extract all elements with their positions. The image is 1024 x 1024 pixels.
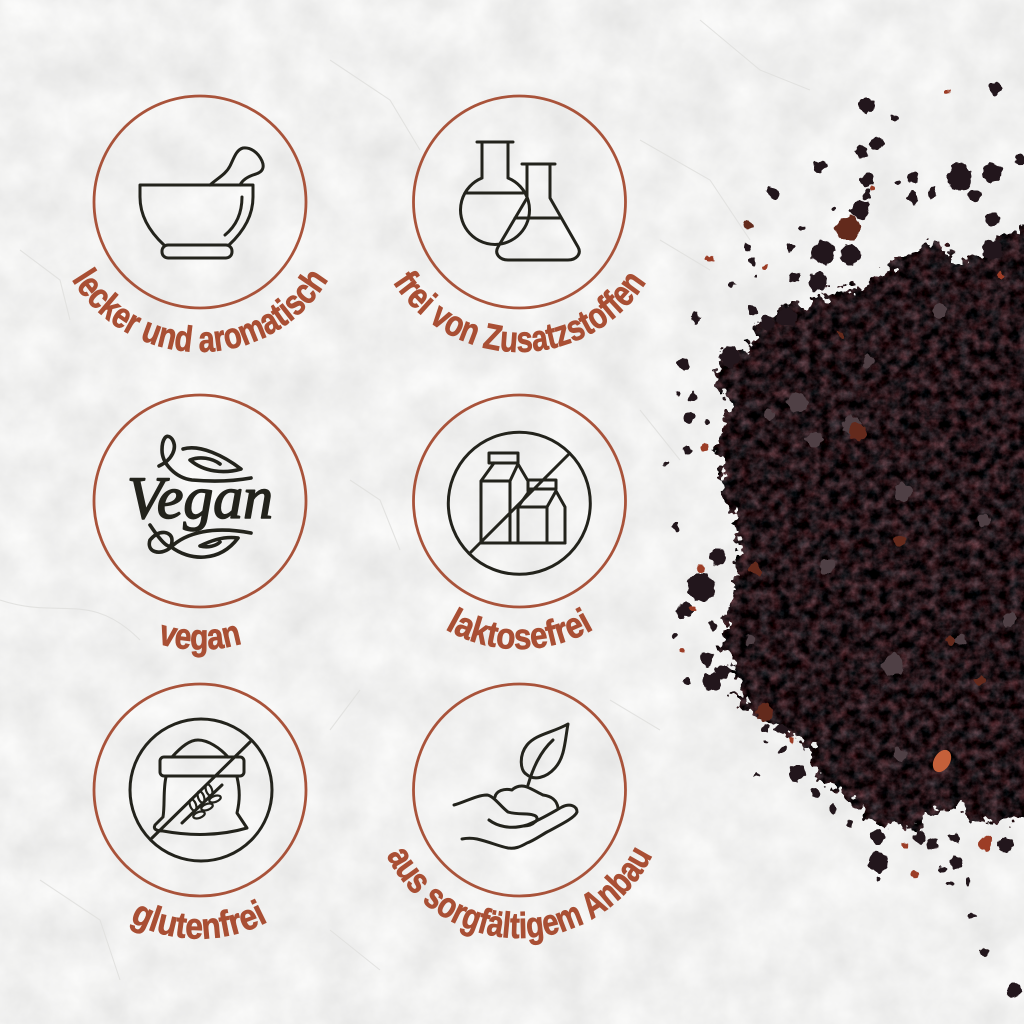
ring	[94, 684, 306, 896]
panel: lecker und aromatisch	[72, 94, 328, 352]
icon: crossed-out flour sack	[130, 719, 272, 861]
panel: aus sorgfältigem Anbau	[388, 682, 652, 946]
panel: laktosefrei	[412, 394, 627, 650]
icon: crossed-out milk cartons	[448, 432, 590, 574]
powder pile	[663, 82, 1024, 997]
loose flakes around the pile	[663, 82, 1024, 997]
icon: laboratory flasks	[461, 142, 579, 260]
label: laktosefrei	[446, 606, 592, 650]
label: aus sorgfältigem Anbau	[388, 847, 652, 946]
label: lecker und aromatisch	[72, 266, 328, 352]
panel: glutenfrei	[92, 682, 308, 940]
ring	[94, 96, 306, 308]
label: vegan	[162, 624, 241, 658]
red-brown interior flakes	[742, 216, 985, 720]
ring	[414, 395, 626, 607]
lighter interior flakes	[745, 304, 1017, 761]
label: frei von Zusatzstoffen	[394, 270, 646, 352]
panel: frei von Zusatzstoffen	[394, 94, 646, 352]
ring	[414, 96, 626, 308]
panel: vegan	[92, 394, 308, 658]
icon: mortar and pestle	[140, 148, 263, 258]
reddish flakes	[679, 89, 1004, 878]
icon: vegan lettering with leaves	[127, 436, 273, 557]
orange flake	[929, 747, 955, 775]
ring	[414, 684, 626, 896]
ring	[94, 395, 306, 607]
label: glutenfrei	[130, 898, 267, 940]
icon: vegan lettering with leaves: Vegan	[127, 465, 273, 531]
icon: hand holding seedling	[454, 724, 577, 848]
